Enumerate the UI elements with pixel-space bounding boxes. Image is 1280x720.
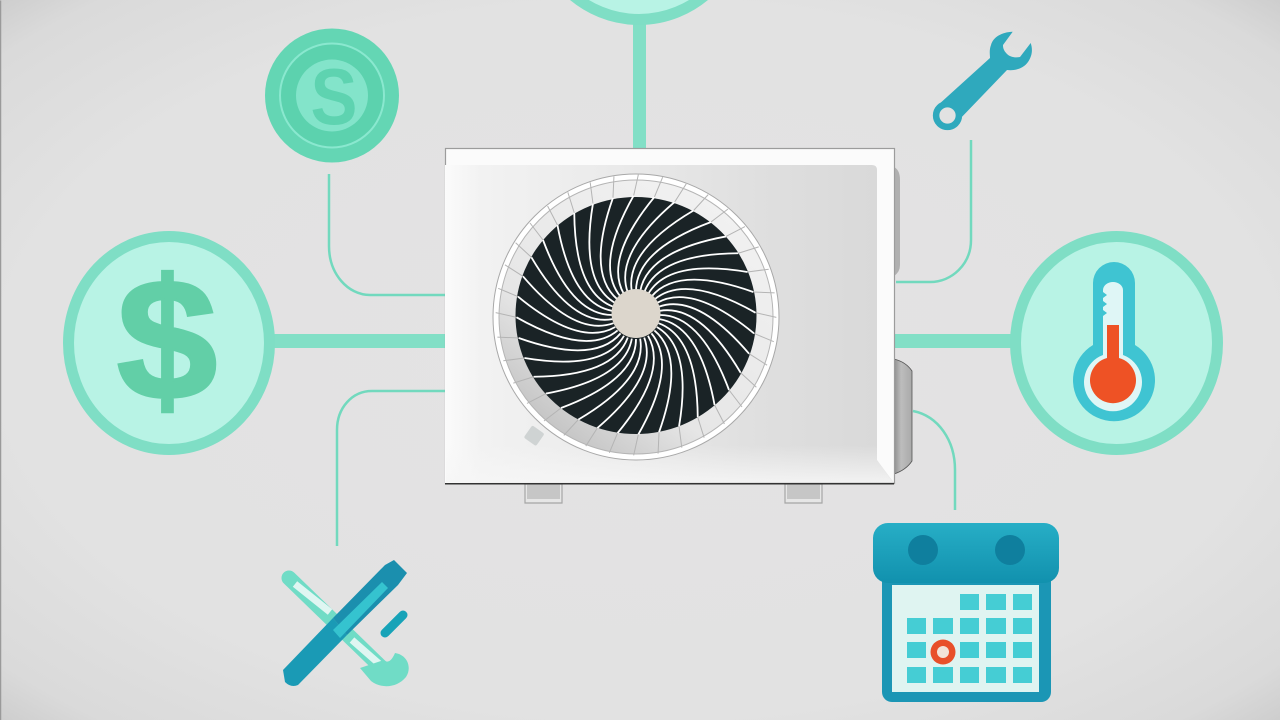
small bar: [385, 615, 403, 633]
screwdriver shaft: [333, 560, 407, 635]
connector: coin to unit: [329, 174, 445, 295]
icon: crossed tools: [283, 560, 409, 686]
bottom fade: [446, 445, 893, 482]
side tab upper: [894, 167, 900, 276]
foot left: [525, 484, 562, 503]
fan hub: [612, 289, 660, 338]
screwdriver: [283, 618, 347, 686]
air conditioner unit: [445, 148, 912, 503]
icon: calendar: [873, 523, 1059, 702]
fan tab: [524, 425, 545, 446]
hook: [360, 653, 409, 686]
connector: left thick line: [272, 334, 445, 348]
casing bottom edge: [445, 482, 894, 484]
casing: [446, 148, 894, 484]
icon: coin: S: [311, 52, 357, 141]
foot right: [785, 484, 822, 503]
connector: calendar to unit: [913, 411, 955, 510]
icon: coin: [265, 28, 399, 162]
icon: top circle: [535, 0, 743, 20]
fan blades: [496, 175, 776, 455]
frame edge: [0, 0, 2, 720]
fan dark disc: [516, 197, 756, 434]
shaft highlight: [333, 582, 388, 638]
side tab lower: [894, 359, 912, 474]
ruler blade: [289, 578, 382, 668]
icon: dollar circle: $: [117, 244, 217, 436]
foot right shade: [787, 484, 820, 499]
ruler inner stripe: [295, 584, 384, 668]
connector: right thick line: [894, 334, 1014, 348]
front panel: [445, 165, 894, 483]
connector: wrench to unit: [896, 140, 971, 282]
foot left shade: [527, 484, 560, 499]
icon: thermometer circle: [1016, 236, 1218, 450]
connector: tools to unit: [337, 391, 445, 546]
icon: dollar circle: [68, 236, 270, 450]
connector: top thick line: [633, 20, 646, 148]
icon: wrench: [936, 32, 1032, 127]
fan ring: [493, 174, 779, 460]
